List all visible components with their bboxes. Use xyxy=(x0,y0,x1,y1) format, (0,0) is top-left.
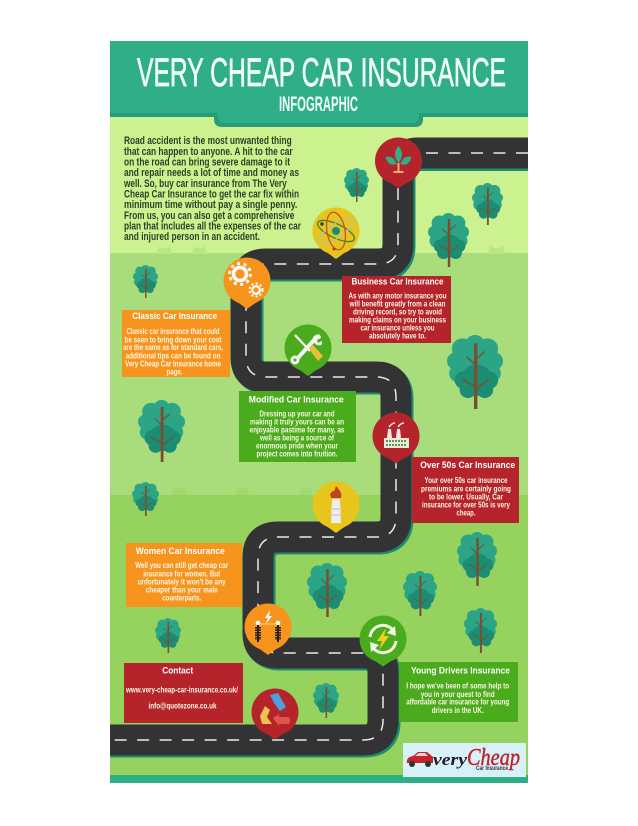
pin: plant (red) xyxy=(375,138,422,188)
icon: tree xyxy=(133,265,158,298)
panel: Over 50s Car Insurance xyxy=(412,457,519,523)
intro text block: and injured person in an accident. xyxy=(124,231,260,243)
panel: infographic background xyxy=(110,41,528,783)
icon: tree xyxy=(132,482,159,516)
pin: gears (orange) xyxy=(224,258,270,309)
panel: Business Car Insurance: making claims on your business xyxy=(349,314,446,324)
panel: Modified Car Insurance xyxy=(239,391,356,462)
icon: tree xyxy=(472,183,503,225)
panel: Women Car Insurance xyxy=(126,543,242,607)
panel: Women Car Insurance: insurance for women. But xyxy=(143,568,220,578)
icon: tree xyxy=(313,683,339,718)
panel: Women Car Insurance: Women Car Insurance xyxy=(136,546,225,556)
panel: Classic Car Insurance: Classic Car Insurance xyxy=(132,311,217,321)
panel: Classic Car Insurance: are the same as for standard cars, xyxy=(123,342,223,352)
panel: Young Drivers Insurance: I hope we've been of some help to xyxy=(406,680,509,690)
panel: Over 50s Car Insurance: Your over 50s car insurance xyxy=(424,475,508,485)
icon: tree xyxy=(428,213,469,267)
panel: Business Car Insurance: As with any motor insurance you xyxy=(348,290,446,300)
panel: Modified Car Insurance: enormous pride when your xyxy=(256,441,338,451)
panel: Contact: www.very-cheap-car-insurance.co.uk/ xyxy=(125,685,238,695)
icon: tree xyxy=(403,571,437,616)
panel: Business Car Insurance xyxy=(342,276,451,343)
pin: factory (red) xyxy=(372,412,420,464)
subtitle: INFOGRAPHIC xyxy=(279,93,358,116)
panel: Business Car Insurance: Business Car Insurance xyxy=(352,276,444,286)
panel: Over 50s Car Insurance: Over 50s Car Insurance xyxy=(420,460,515,470)
panel: Classic Car Insurance: Classic car insurance that could xyxy=(126,326,220,336)
panel: Young Drivers Insurance: affordable car insurance for young xyxy=(406,697,509,707)
winding road xyxy=(110,153,528,742)
icon: tree xyxy=(155,618,181,653)
panel: Contact: info@quotezone.co.uk xyxy=(148,701,217,711)
icon: tree xyxy=(457,532,497,586)
intro text block: minimum time without pay a single penny. xyxy=(124,199,297,211)
panel: Classic Car Insurance: be seen to bring down your cost xyxy=(124,334,222,344)
trees xyxy=(132,168,503,718)
panel: Classic Car Insurance: additional tips can be found on xyxy=(126,350,220,360)
intro text block: From us, you can also get a comprehensive xyxy=(124,210,294,222)
icon: tree xyxy=(447,335,503,409)
panel: Business Car Insurance: will benefit greatly from a clean xyxy=(349,298,446,308)
intro text block: Cheap Car Insurance to get the car fix within xyxy=(124,188,299,200)
panel: Modified Car Insurance: making it truly yours can be an xyxy=(250,416,344,426)
intro text block: Road accident is the most unwanted thing xyxy=(124,135,292,147)
logo: Very Cheap Car Insurance xyxy=(403,743,526,777)
panel: Classic Car Insurance: page. xyxy=(166,367,182,377)
panel: Women Car Insurance: unfortunately it won't be any xyxy=(138,577,226,587)
icon: red car xyxy=(407,752,433,767)
panel: Young Drivers Insurance: Young Drivers Insurance xyxy=(411,666,510,676)
logo: Very Cheap Car Insurance: Car Insurance xyxy=(476,766,509,772)
panel: Over 50s Car Insurance: cheap. xyxy=(456,507,476,517)
pin: atom (yellow) xyxy=(312,208,360,259)
intro text block: plan that includes all the expenses of the car xyxy=(124,220,302,232)
panel: Over 50s Car Insurance: insurance for over 50s is very xyxy=(422,499,510,509)
panel: Classic Car Insurance xyxy=(122,310,230,377)
panel: Modified Car Insurance: Dressing up your car and xyxy=(260,408,334,418)
panel: Modified Car Insurance: enjoyable pastime for many, as xyxy=(250,425,345,435)
panel: Business Car Insurance: absolutely have to. xyxy=(369,331,426,341)
panel: Modified Car Insurance: Modified Car Insurance xyxy=(249,394,344,404)
panel: Modified Car Insurance: well as being a source of xyxy=(259,432,334,442)
panel: Young Drivers Insurance: drivers in the UK. xyxy=(432,705,484,715)
icon: tree xyxy=(344,168,369,202)
pin: renewable energy (green) xyxy=(360,616,406,666)
intro text block xyxy=(123,135,302,243)
icon: tree xyxy=(464,608,497,653)
pin: flare stack (yellow) xyxy=(312,482,360,533)
icon: tree xyxy=(307,563,347,617)
panel: Business Car Insurance: car insurance unless you xyxy=(360,323,434,333)
pin: power pylons (orange) xyxy=(244,604,292,655)
pin: tools (green) xyxy=(284,324,332,376)
header banner xyxy=(110,41,528,127)
panel: Over 50s Car Insurance: to be lower. Usually, Car xyxy=(429,491,503,501)
pin: recycle (red) xyxy=(252,688,298,740)
intro text block: well. So, buy car insurance from The Very xyxy=(123,178,287,190)
intro text block: that can happen to anyone. A hit to the car xyxy=(124,146,293,158)
intro text block: on the road can bring severe damage to it xyxy=(124,156,290,168)
panel: Women Car Insurance: Well you can still get cheap car xyxy=(135,560,229,570)
panel: Women Car Insurance: cheaper than your male xyxy=(146,585,218,595)
logo: Very Cheap Car Insurance: Cheap xyxy=(467,745,520,771)
icon: tree xyxy=(138,400,185,462)
panel: Over 50s Car Insurance: premiums are certainly going xyxy=(421,483,511,493)
panel: Women Car Insurance: counterparts. xyxy=(162,593,201,603)
panel: Young Drivers Insurance: you in your quest to find xyxy=(421,689,495,699)
panel: Contact xyxy=(124,663,243,723)
panel: Modified Car Insurance: project comes into fruition. xyxy=(256,449,338,459)
panel: Young Drivers Insurance xyxy=(399,662,518,722)
panel: Contact: Contact xyxy=(162,666,193,676)
logo: Very Cheap Car Insurance: very xyxy=(433,750,468,769)
panel: Classic Car Insurance: Very Cheap Car Insurance home xyxy=(125,358,221,368)
intro text block: and repair needs a lot of time and money as xyxy=(124,167,299,179)
panel: Business Car Insurance: driving record, so try to avoid xyxy=(353,307,442,317)
